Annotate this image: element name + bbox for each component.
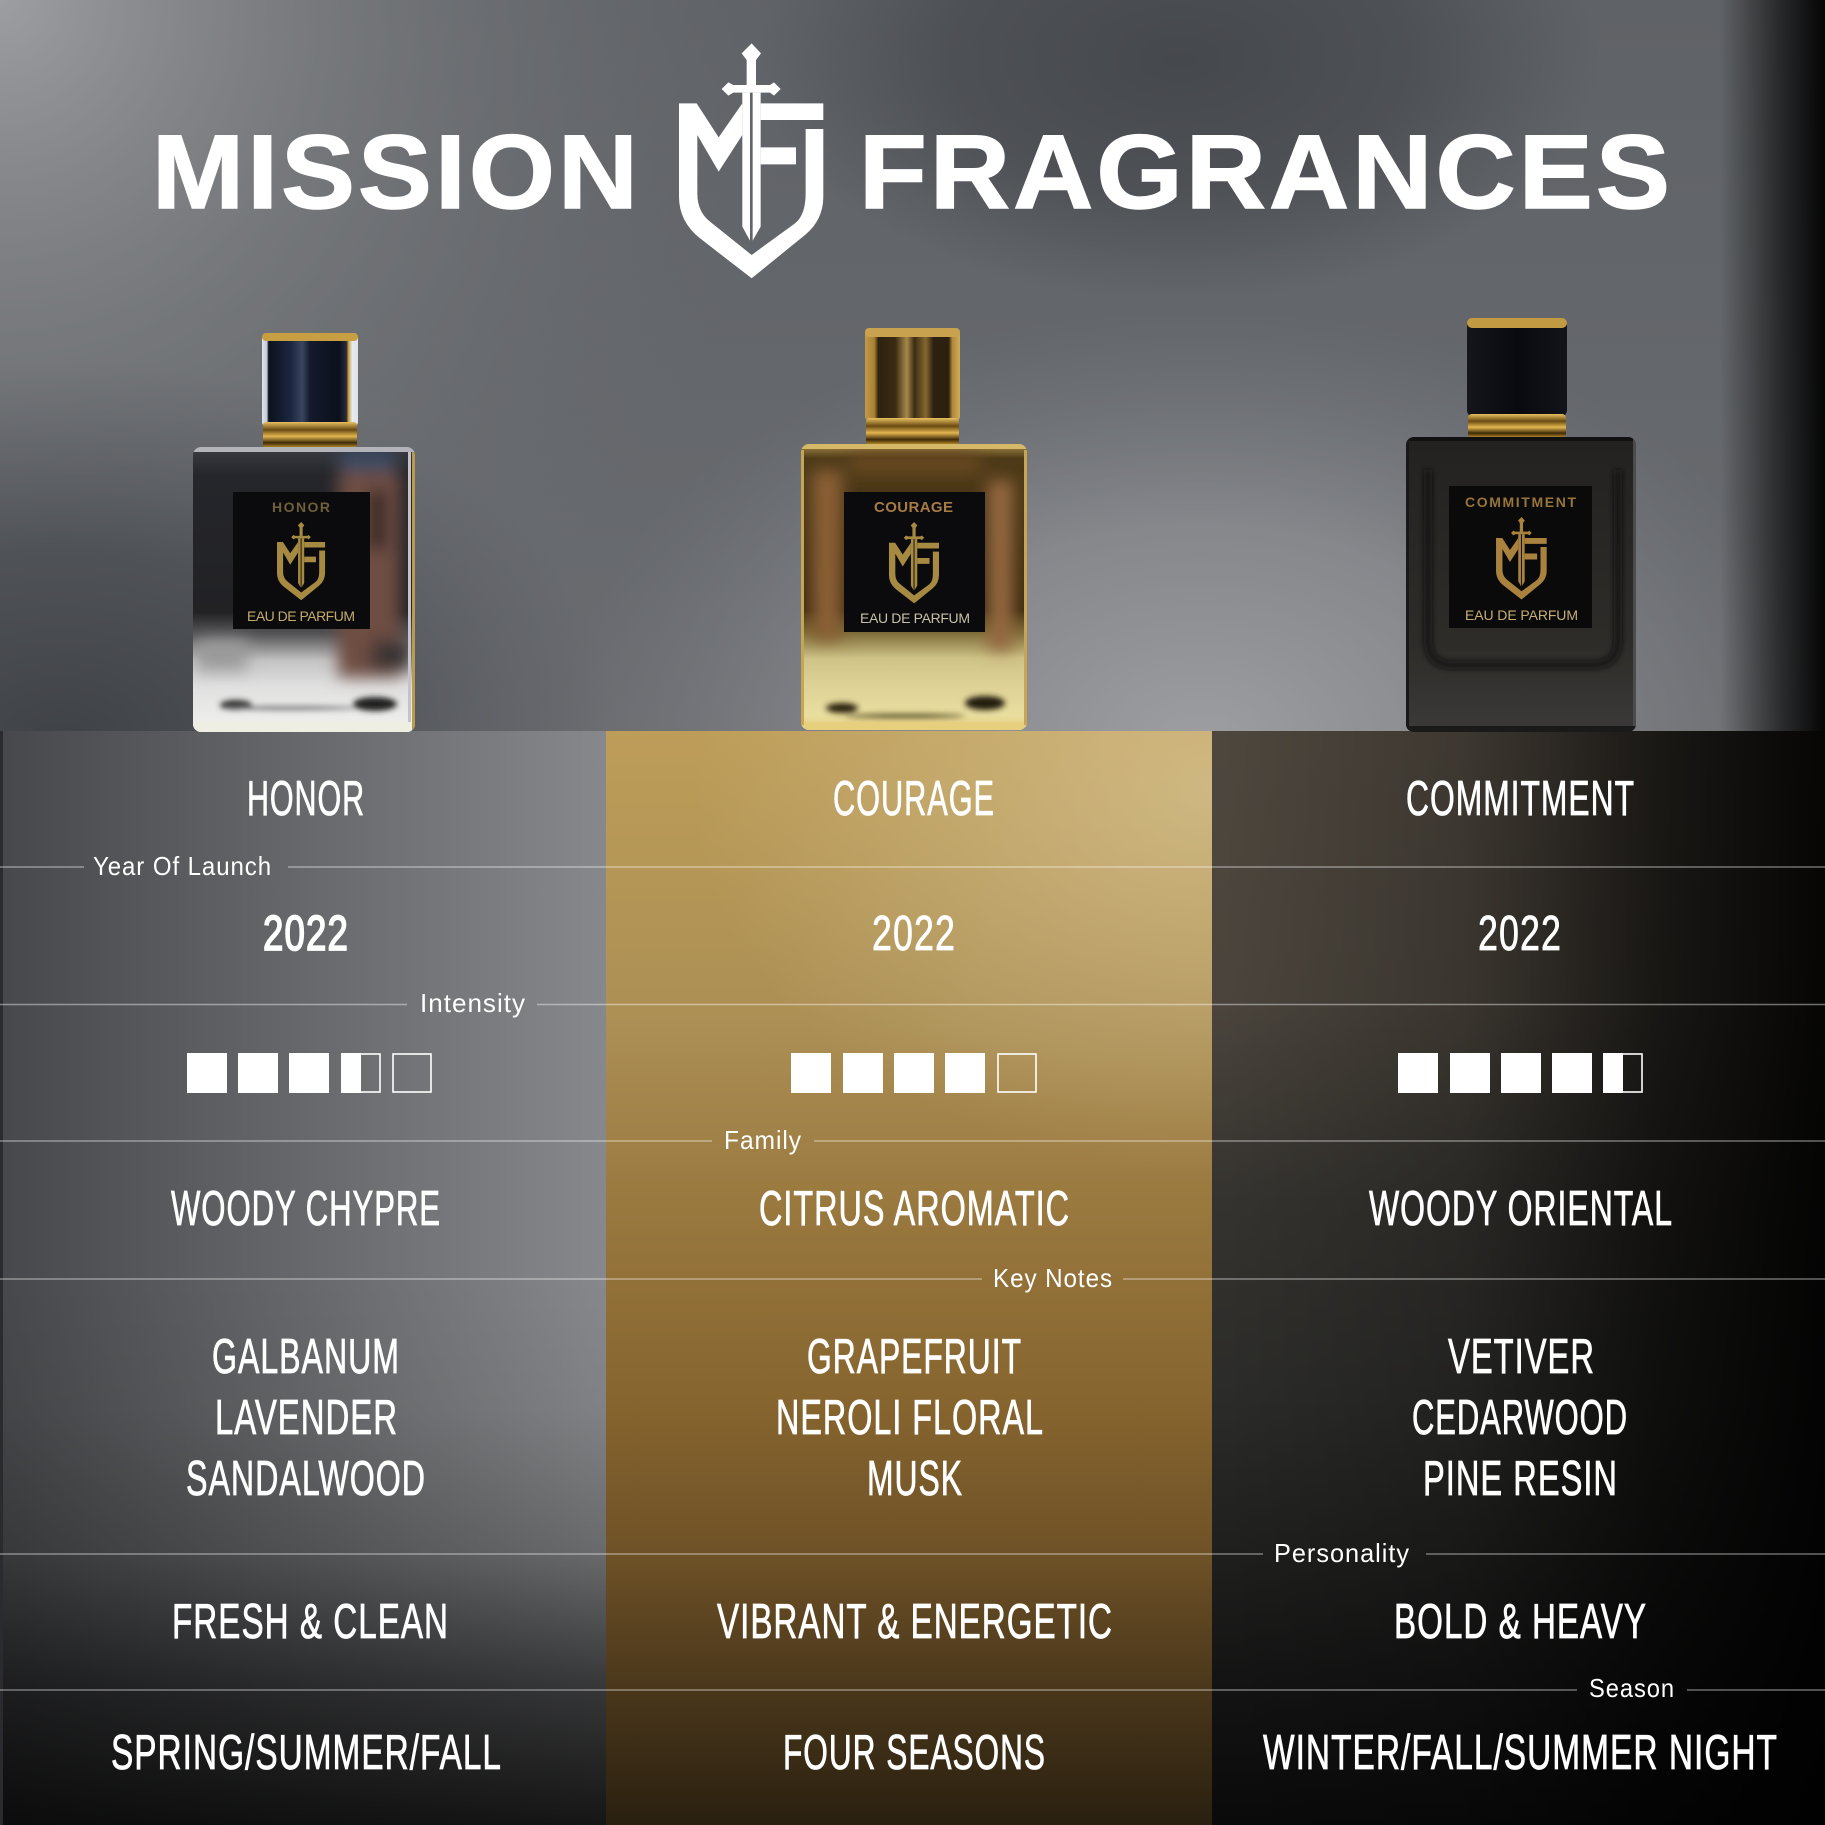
icon: MFJ shield logo with sword <box>679 43 823 278</box>
label: Family: Family <box>724 1125 802 1155</box>
list: Commitment key notes: CEDARWOOD <box>1412 1391 1628 1445</box>
row: season values: SPRING/SUMMER/FALL <box>111 1726 502 1780</box>
title word: Mission: MISSION <box>152 114 641 231</box>
label: Intensity: Intensity <box>420 988 526 1018</box>
label name: COMMITMENT <box>1465 494 1576 510</box>
bottle body <box>801 444 1027 730</box>
list: Honor key notes <box>186 1330 426 1506</box>
row: fragrance names: HONOR <box>247 772 365 826</box>
list: Honor key notes: SANDALWOOD <box>186 1452 426 1506</box>
row: fragrance names: COMMITMENT <box>1406 772 1635 826</box>
title: brand name and logo <box>152 43 1673 278</box>
bottle label <box>233 492 370 629</box>
bottle label <box>1449 486 1592 628</box>
label logo <box>1496 517 1547 599</box>
label: Personality: Personality <box>1274 1538 1410 1568</box>
row: family values: WOODY CHYPRE <box>171 1182 441 1236</box>
row: family values: WOODY ORIENTAL <box>1369 1182 1673 1236</box>
bottle cap <box>865 328 960 445</box>
bottle body <box>1406 437 1636 732</box>
row: year of launch values: 2022 <box>872 907 956 961</box>
panel: Commitment column background <box>1212 731 1825 1825</box>
row: year of launch values <box>263 907 1562 961</box>
row: fragrance names <box>247 772 1635 826</box>
bottle: Honor <box>193 333 415 732</box>
row: year of launch values: 2022 <box>263 907 349 961</box>
rating: Commitment intensity 4.5 of 5 <box>1398 1053 1642 1093</box>
list: Commitment key notes <box>1412 1330 1628 1506</box>
list: Courage key notes: GRAPEFRUIT <box>807 1330 1022 1384</box>
row: personality values: BOLD & HEAVY <box>1394 1595 1647 1649</box>
row: fragrance names: COURAGE <box>833 772 995 826</box>
list: Honor key notes: LAVENDER <box>215 1391 398 1445</box>
bottle cap <box>262 333 358 448</box>
row: family values <box>171 1182 1673 1236</box>
label eau de parfum: EAU DE PARFUM <box>860 610 970 626</box>
label eau de parfum: EAU DE PARFUM <box>1465 607 1578 623</box>
label logo <box>889 522 939 603</box>
label logo <box>277 522 325 600</box>
panel: Courage column background <box>606 731 1212 1825</box>
label: Season: Season <box>1589 1673 1675 1703</box>
label: Year Of Launch: Year Of Launch <box>93 851 272 881</box>
background: grey studio gradient <box>0 0 1825 731</box>
row: family values: CITRUS AROMATIC <box>759 1182 1070 1236</box>
bottle body <box>193 447 415 732</box>
bottle: Courage <box>801 328 1027 730</box>
title word: Fragrances: FRAGRANCES <box>859 114 1673 231</box>
rating: Courage intensity 4 of 5 <box>791 1053 1036 1093</box>
list: Honor key notes: GALBANUM <box>212 1330 400 1384</box>
label name: HONOR <box>272 499 330 515</box>
row: personality values: FRESH & CLEAN <box>172 1595 449 1649</box>
row: season values <box>111 1726 1778 1780</box>
label eau de parfum: EAU DE PARFUM <box>247 608 355 624</box>
list: Courage key notes <box>776 1330 1044 1506</box>
bottle label <box>844 492 985 632</box>
row: personality values <box>172 1595 1647 1649</box>
list: Commitment key notes: VETIVER <box>1448 1330 1595 1384</box>
row: season values: FOUR SEASONS <box>783 1726 1046 1780</box>
list: Courage key notes: MUSK <box>867 1452 963 1506</box>
list: Courage key notes: NEROLI FLORAL <box>776 1391 1044 1445</box>
panel: Honor column background <box>0 731 606 1825</box>
bottle: Commitment <box>1406 318 1636 732</box>
row: year of launch values: 2022 <box>1478 907 1562 961</box>
list: Commitment key notes: PINE RESIN <box>1423 1452 1618 1506</box>
bottle cap <box>1467 318 1567 438</box>
row: personality values: VIBRANT & ENERGETIC <box>717 1595 1113 1649</box>
rating: Honor intensity 3.5 of 5 <box>187 1053 431 1093</box>
label: Key Notes: Key Notes <box>993 1263 1113 1293</box>
label name: COURAGE <box>874 499 953 516</box>
